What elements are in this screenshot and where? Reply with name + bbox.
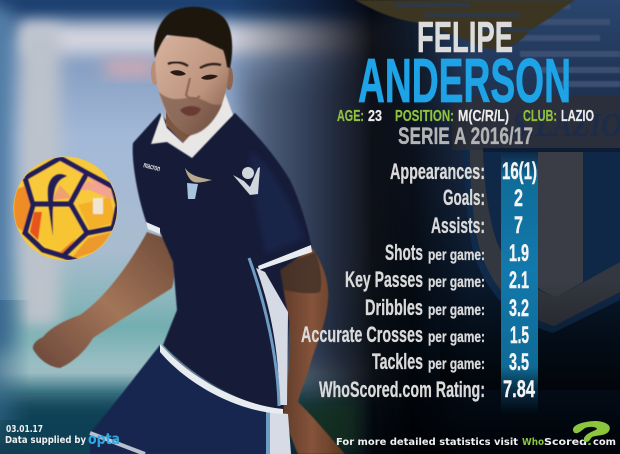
stat labels: per game: xyxy=(428,356,485,373)
stat values xyxy=(502,158,537,403)
stat labels: Goals: xyxy=(443,185,485,210)
stat labels: Shots xyxy=(385,240,423,265)
beard stubble xyxy=(159,92,222,136)
stat values: 3.5 xyxy=(509,349,529,376)
player info line: POSITION: xyxy=(395,108,454,125)
nose xyxy=(186,78,200,99)
stat labels: per game: xyxy=(428,302,485,319)
macron chest wordmark: macron xyxy=(142,160,161,173)
eagle feathers xyxy=(520,4,620,88)
eyebrows xyxy=(168,62,221,68)
player xyxy=(33,7,345,454)
shorts bottom trim xyxy=(90,433,145,454)
footer link text: com xyxy=(593,437,616,448)
hair xyxy=(154,7,232,68)
stat values: 7.84 xyxy=(503,376,535,403)
stat labels: per game: xyxy=(428,247,485,264)
background: Lazio crest watermark xyxy=(370,0,620,454)
shorts xyxy=(90,345,292,454)
stat values: 2.1 xyxy=(509,267,529,294)
player info line: AGE: xyxy=(337,108,364,125)
player info line: CLUB: xyxy=(523,108,557,125)
stat values: 1.9 xyxy=(509,240,529,267)
crest outer shield xyxy=(464,150,620,333)
ball pink upper panels xyxy=(62,162,114,198)
stat labels xyxy=(301,159,485,402)
date and data credit: 03.01.17 xyxy=(6,424,43,435)
shorts white side panel xyxy=(268,412,291,454)
WhoScored question mark logo xyxy=(573,421,610,442)
LAZIO banner on crest xyxy=(452,96,620,150)
footer link text xyxy=(336,437,616,448)
player info line: M(C/R/L) xyxy=(458,108,509,125)
competition subtitle: SERIE A 2016/17 xyxy=(398,123,533,150)
stat highlight column xyxy=(501,152,538,414)
Lazio eagle badge xyxy=(185,168,212,199)
jersey side panel xyxy=(256,268,288,405)
jersey side piping xyxy=(249,258,279,406)
player info line: 23 xyxy=(368,108,382,125)
right sleeve cuff xyxy=(258,245,312,270)
stat values: 16(1) xyxy=(502,158,537,185)
ball nike swoosh xyxy=(48,174,67,236)
collar xyxy=(151,93,233,158)
player info line xyxy=(337,108,594,125)
ball left panel xyxy=(14,185,32,232)
tattoo xyxy=(270,252,321,293)
stat labels: WhoScored.com Rating: xyxy=(319,377,485,402)
ball bottom orange panel xyxy=(50,238,76,254)
title: FELIPE: FELIPE xyxy=(417,13,513,62)
left arm and hand xyxy=(33,232,174,368)
ball orange centre panel xyxy=(52,185,72,200)
neck xyxy=(166,88,226,150)
date and data credit: Data supplied by xyxy=(5,435,87,446)
footer link text: . xyxy=(587,437,592,448)
shorts blue piping xyxy=(266,412,270,454)
stat labels: Key Passes xyxy=(345,267,423,292)
footer link text: For more detailed statistics visit xyxy=(336,437,518,448)
crest grey border band xyxy=(470,150,620,326)
stat values: 2 xyxy=(514,185,523,212)
crest bottom fade xyxy=(440,303,620,390)
date and data credit xyxy=(5,424,87,446)
stat labels: Dribbles xyxy=(365,295,423,320)
stat values: 7 xyxy=(514,212,523,239)
stat values: 3.2 xyxy=(509,295,529,322)
jersey hem xyxy=(160,344,283,414)
stat labels: Tackles xyxy=(372,349,423,374)
eagle wing xyxy=(355,0,575,49)
stat labels: Assists: xyxy=(431,213,485,238)
stat labels: Accurate Crosses xyxy=(301,322,423,347)
eagle wing texture xyxy=(395,5,530,30)
crest top band xyxy=(483,148,620,152)
stat labels: per game: xyxy=(428,329,485,346)
left sleeve cuff xyxy=(146,222,160,234)
stat values: 1.5 xyxy=(510,322,529,349)
Opta logo: opta xyxy=(88,430,120,448)
mouth xyxy=(180,106,201,116)
macron logo xyxy=(233,167,260,195)
right arm xyxy=(262,248,345,454)
crest inner shield xyxy=(483,150,620,297)
jersey sleeve highlight xyxy=(250,150,304,254)
stat labels: per game: xyxy=(428,274,485,291)
football xyxy=(14,156,118,262)
stat labels: Appearances: xyxy=(390,159,485,184)
eyes xyxy=(170,70,218,80)
right ear xyxy=(225,66,233,90)
ball bottom right panel xyxy=(70,232,112,260)
crest grey centre stripe xyxy=(538,150,583,297)
ball lower red-orange corner xyxy=(30,212,42,240)
footer link text: Scored xyxy=(544,437,587,448)
player info line: LAZIO xyxy=(561,108,594,125)
ball serie A patch xyxy=(93,198,103,214)
ball right orange panel xyxy=(78,197,116,230)
face xyxy=(155,33,229,135)
ball lower yellow panel xyxy=(36,208,84,250)
left ear xyxy=(151,61,159,85)
ball dark seams xyxy=(25,158,118,262)
footer link text: Who xyxy=(522,437,544,448)
jersey xyxy=(133,113,312,412)
